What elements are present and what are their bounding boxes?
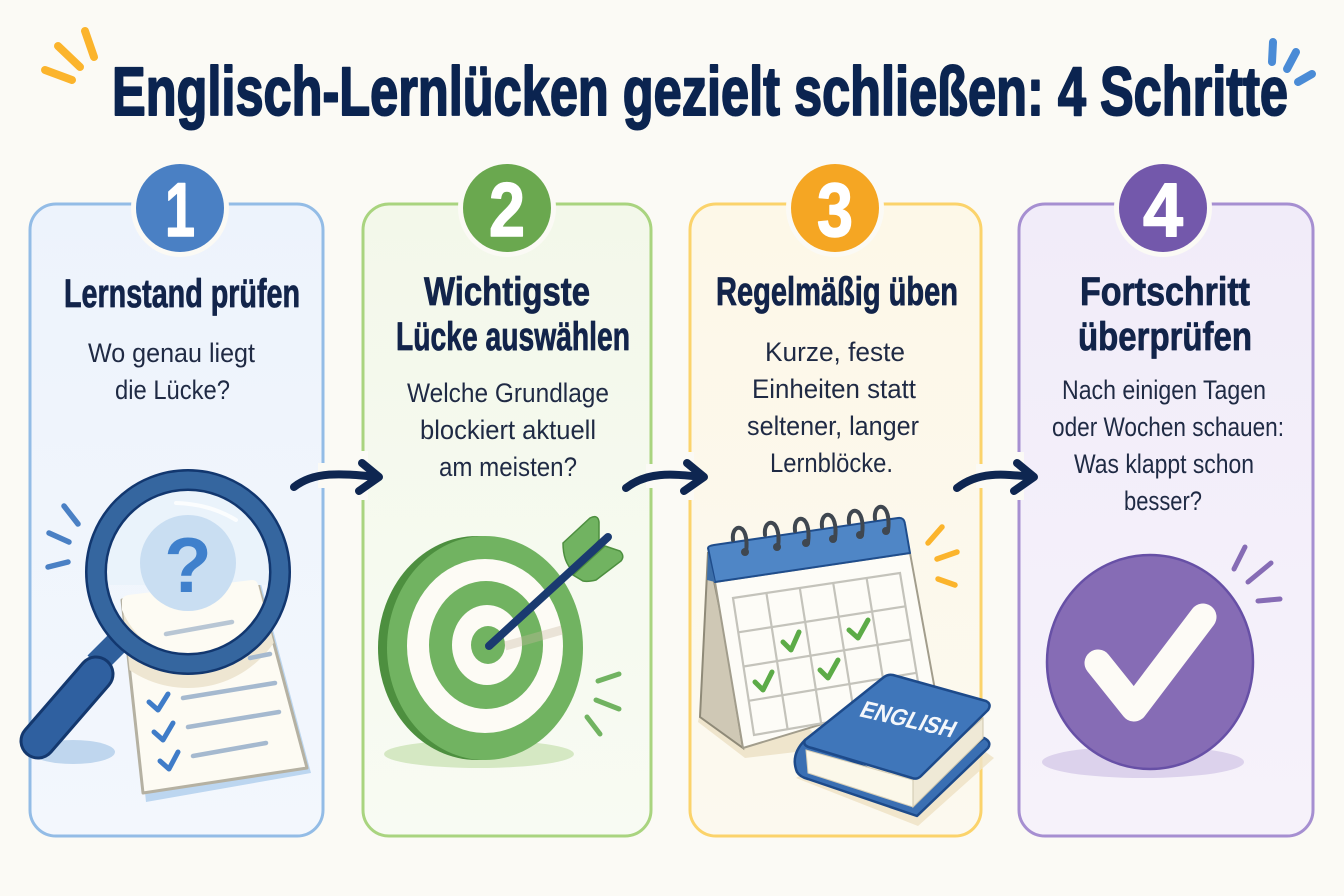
panel: step 1: [30, 159, 323, 836]
body text: Nach einigen Tagen: [1062, 375, 1266, 405]
number badge 1: 1: [165, 168, 195, 253]
icon: sparkle lines: [587, 674, 619, 734]
heading: Fortschritt: [1080, 270, 1250, 314]
heading: [396, 270, 630, 359]
number badge 4: 4: [1143, 168, 1183, 253]
icon: magnifying glass: [31, 480, 280, 764]
body text: am meisten?: [439, 452, 577, 482]
arrow: step 2 to step 3: [626, 452, 704, 500]
body text: [88, 338, 255, 405]
number badge 2: [458, 159, 556, 257]
icon: magnifying glass: ?: [164, 521, 212, 609]
icon: blue sparkle right of title: [1272, 42, 1312, 82]
body text: Lernblöcke.: [770, 448, 893, 478]
icon: sparkle lines: [1234, 547, 1280, 601]
body text: [1052, 375, 1284, 516]
body text: [747, 337, 919, 478]
icon: target with arrow: [378, 517, 623, 768]
body text: Wo genau liegt: [88, 338, 255, 368]
arrow: step 1 to step 2: [294, 451, 379, 500]
heading: überprüfen: [1078, 315, 1252, 359]
body text: [407, 378, 609, 482]
number badge 3: [786, 159, 884, 257]
number badge 3: 3: [817, 168, 853, 253]
body text: Einheiten statt: [752, 374, 916, 404]
icon: desk calendar: [698, 507, 935, 758]
body text: die Lücke?: [115, 375, 230, 405]
heading: Lernstand prüfen: [64, 272, 300, 316]
heading: [1078, 270, 1252, 359]
body text: Welche Grundlage: [407, 378, 609, 408]
body text: blockiert aktuell: [420, 415, 596, 445]
body text: oder Wochen schauen:: [1052, 412, 1284, 442]
heading: Lücke auswählen: [396, 315, 630, 359]
panel: step 2: [363, 159, 651, 836]
number badge 1: [131, 159, 229, 257]
icon: orange sparkle left of title: [45, 31, 94, 80]
icon: English book: ENGLISH: [855, 697, 961, 743]
card background: [1019, 204, 1313, 836]
icon: checklist paper: [120, 585, 311, 802]
card background: [690, 204, 981, 836]
heading: Regelmäßig üben: [716, 270, 958, 314]
icon: check badge: [1042, 555, 1253, 778]
card background: [30, 204, 323, 836]
heading: Wichtigste: [424, 270, 590, 314]
body text: Was klappt schon: [1074, 449, 1254, 479]
arrow: step 3 to step 4: [957, 452, 1034, 500]
icon: sparkle lines: [48, 506, 78, 567]
number badge 4: [1114, 159, 1212, 257]
number badge 2: 2: [489, 168, 525, 253]
panel: step 3: [690, 159, 994, 836]
panel: step 4: [1019, 159, 1313, 836]
body text: Kurze, feste: [765, 337, 905, 367]
icon: English book: [795, 675, 994, 826]
icon: sparkle lines: [928, 527, 957, 585]
body text: seltener, langer: [747, 411, 919, 441]
body text: besser?: [1124, 486, 1202, 516]
card background: [363, 204, 651, 836]
